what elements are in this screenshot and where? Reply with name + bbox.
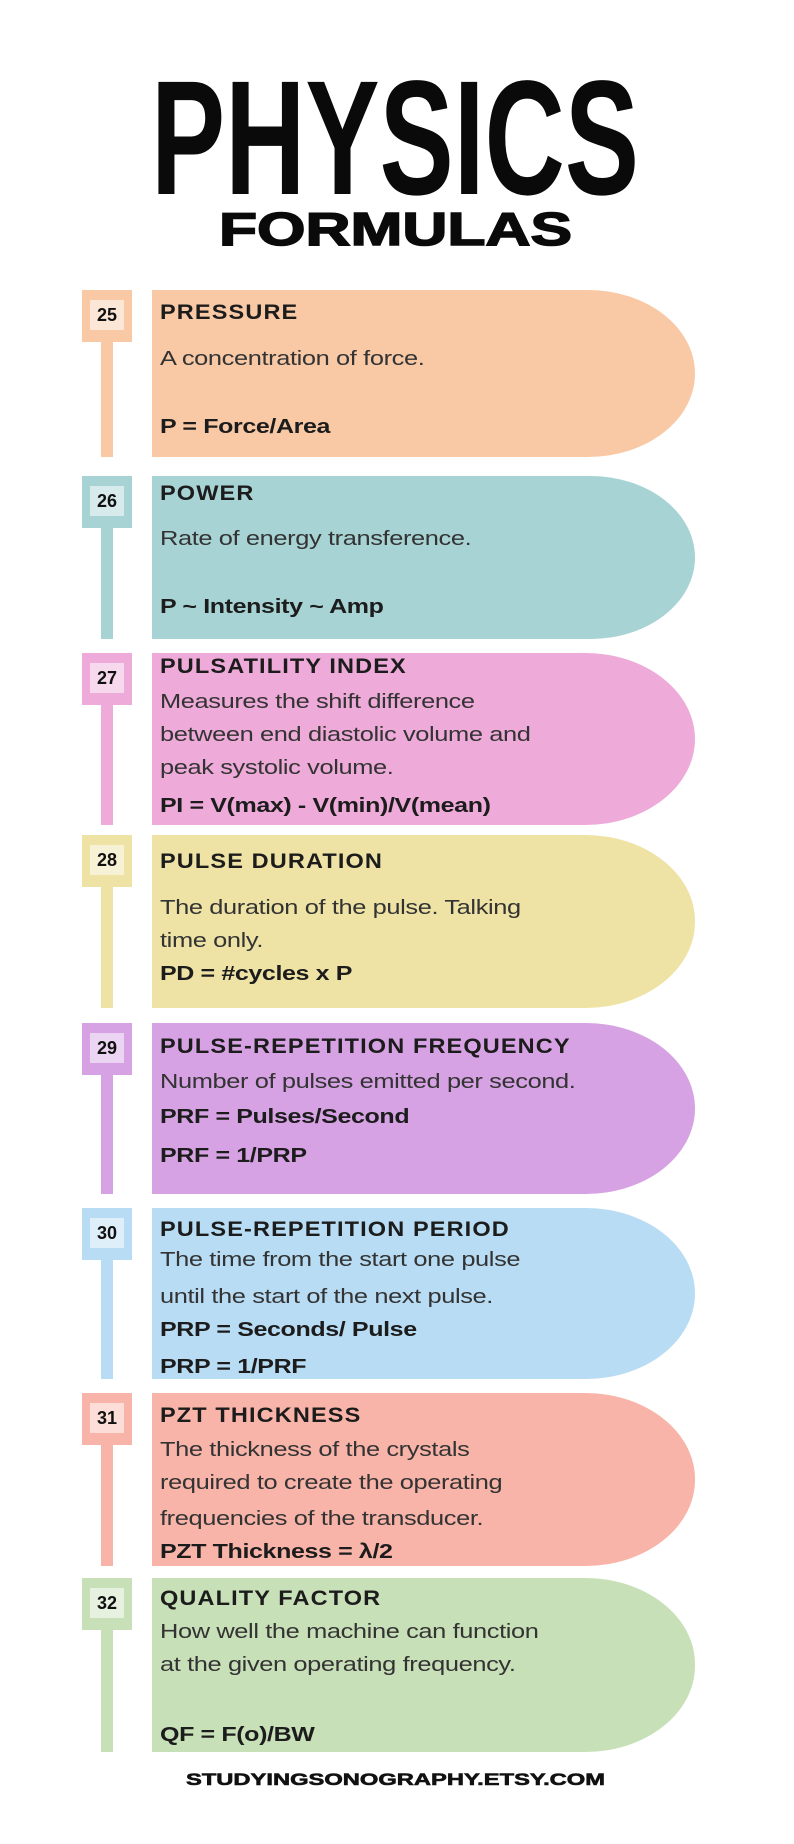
number 32: 32 [97,1593,117,1613]
number 27 [82,653,132,705]
text: time only. [160,930,263,952]
number 26 [82,476,132,528]
panel: 25 pressure [152,290,695,457]
text: frequencies of the transducer. [160,1508,483,1530]
text: pulsatility: PULSATILITY INDEX [160,655,407,678]
text: at the given operating frequency. [160,1654,516,1676]
text: Measures the shift difference [160,691,475,713]
text: PRP: PULSE-REPETITION PERIOD [160,1218,510,1241]
text: quality factor: QUALITY FACTOR [160,1587,381,1610]
text: PZT Thickness = λ/2 [160,1541,393,1563]
panel: 27 pulsatility [152,653,695,825]
text: QF = F(o)/BW [160,1724,315,1746]
title [151,46,639,255]
text: The time from the start one pulse [160,1249,520,1271]
text: PRF: PULSE-REPETITION FREQUENCY [160,1035,571,1058]
text: between end diastolic volume and [160,724,530,746]
panel: 30 PRP [152,1208,695,1379]
text: PI = V(max) - V(min)/V(mean) [160,795,491,817]
number 28 [82,835,132,887]
panel: 29 PRF [152,1023,695,1194]
text: How well the machine can function [160,1621,539,1643]
text: required to create the operating [160,1472,502,1494]
panel: 32 quality factor [152,1578,695,1752]
title: FORMULAS [219,203,572,255]
text: PRF = Pulses/Second [160,1106,409,1128]
text: The thickness of the crystals [160,1439,469,1461]
number 30: 30 [97,1223,117,1243]
footer: STUDYINGSONOGRAPHY.ETSY.COM [186,1770,605,1789]
number 25 [82,290,132,342]
number 29: 29 [97,1038,117,1058]
number 30 [82,1208,132,1260]
text: P ~ Intensity ~ Amp [160,596,384,618]
text: pulse duration: PULSE DURATION [160,850,383,873]
panel: 26 power [152,476,695,639]
number 25: 25 [97,305,117,325]
text: Number of pulses emitted per second. [160,1071,575,1093]
text: power: POWER [160,482,254,505]
text: PRP = Seconds/ Pulse [160,1319,417,1341]
text: Rate of energy transference. [160,528,471,550]
text: peak systolic volume. [160,757,393,779]
text: A concentration of force. [160,348,424,370]
text: PRF = 1/PRP [160,1145,307,1167]
text: The duration of the pulse. Talking [160,897,521,919]
text: pressure: PRESSURE [160,301,298,324]
number 32 [82,1578,132,1630]
number 31 [82,1393,132,1445]
number 26: 26 [97,491,117,511]
number 27: 27 [97,668,117,688]
text: until the start of the next pulse. [160,1286,493,1308]
panel: 28 pulse duration [152,835,695,1008]
text: P = Force/Area [160,416,330,438]
number 31: 31 [97,1408,117,1428]
text: PRP = 1/PRF [160,1356,306,1378]
text: PZT: PZT THICKNESS [160,1404,361,1427]
panel: 31 PZT [152,1393,695,1566]
text: PD = #cycles x P [160,963,352,985]
number 28: 28 [97,850,117,870]
number 29 [82,1023,132,1075]
